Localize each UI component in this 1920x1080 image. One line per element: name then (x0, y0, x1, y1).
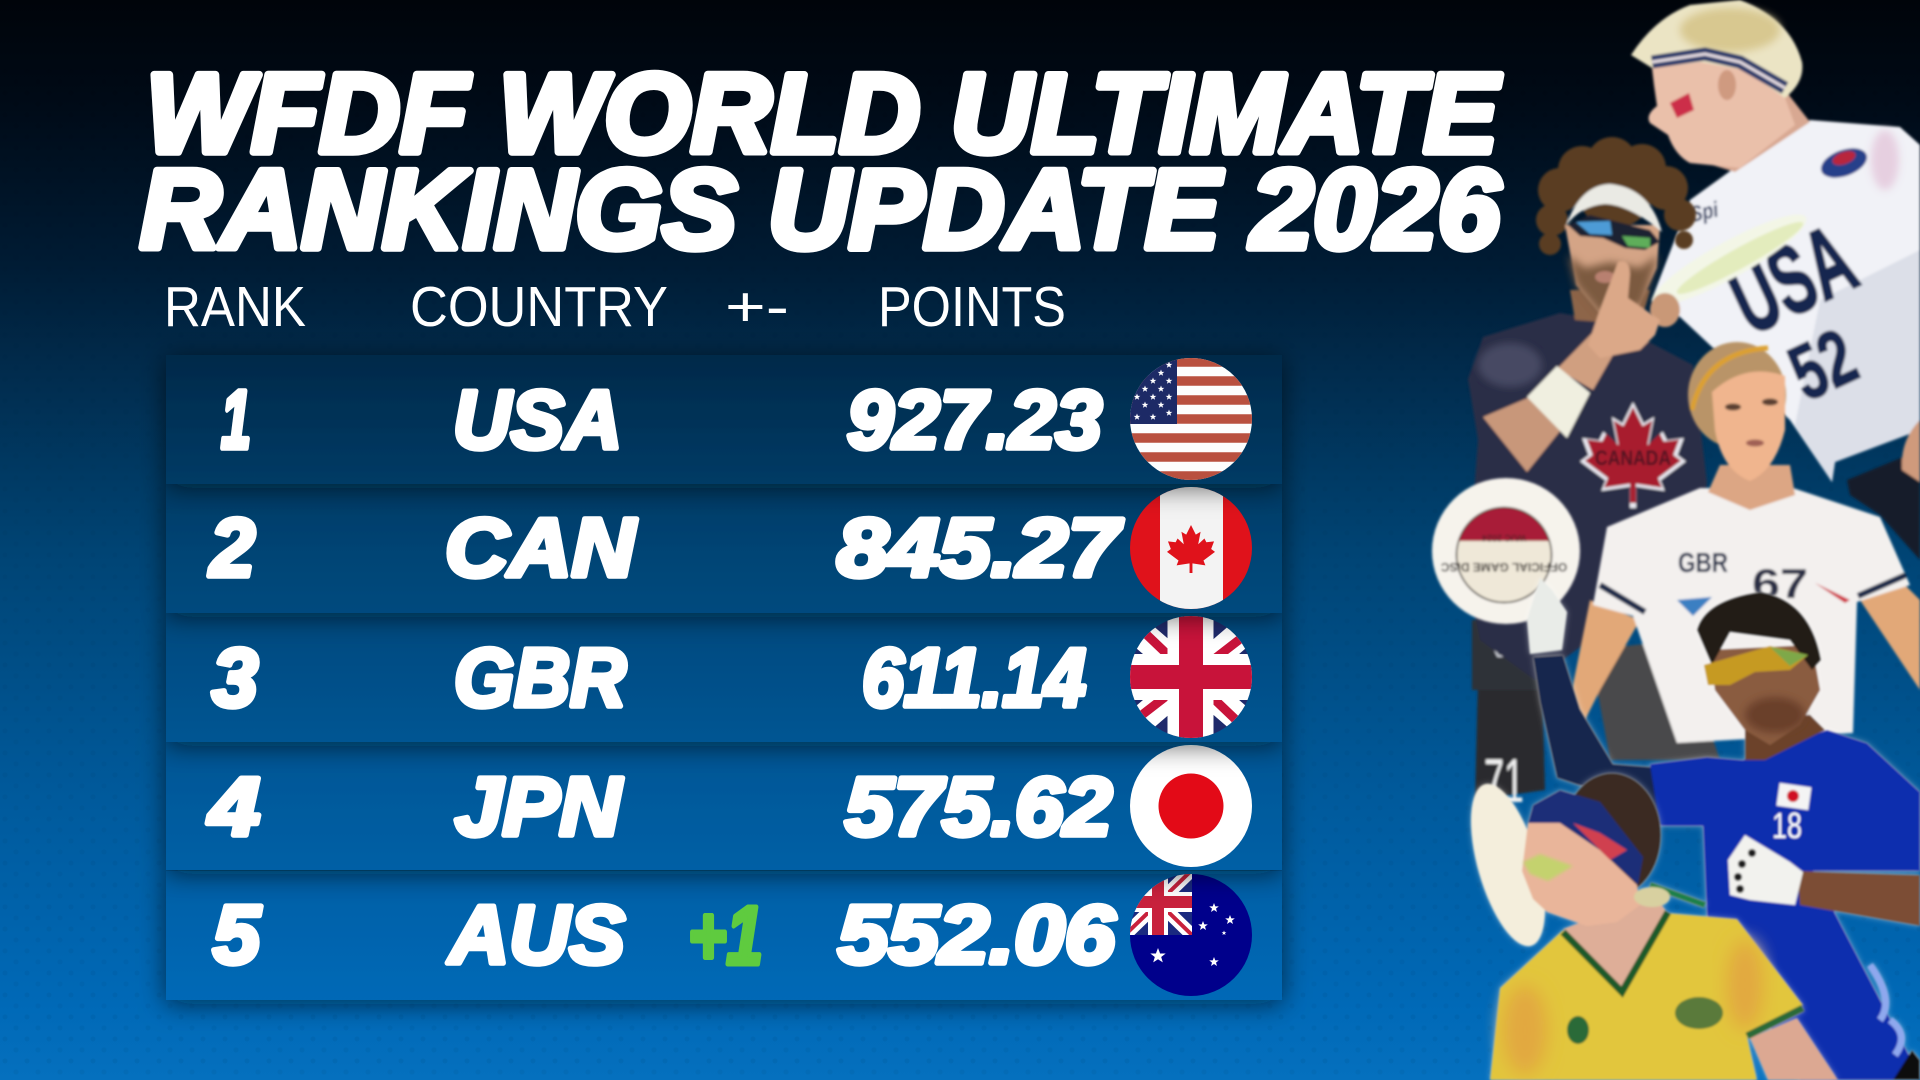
player: Great Britain: 67 (1752, 560, 1808, 607)
pointing hand (1588, 261, 1660, 358)
row: rank 3 Great Britain (166, 610, 1282, 744)
face paint (1670, 93, 1694, 118)
face (1710, 645, 1820, 745)
sunglasses (1568, 215, 1660, 250)
jersey (1593, 488, 1910, 743)
disc: official game disc (1432, 478, 1580, 624)
player: USA: 52 (1776, 311, 1869, 417)
jersey (1490, 913, 1803, 1080)
raised arm (1533, 655, 1660, 826)
disc: official game disc: WUC 2024 (1482, 533, 1526, 543)
row: rank 4 Japan: 575.62 (845, 760, 1112, 853)
jersey lettering: GBR (1678, 547, 1728, 578)
eyes and mouth (1725, 404, 1741, 410)
row: rank 3 Great Britain: GBR (454, 631, 626, 724)
row: rank 5 Australia: 552.06 (838, 888, 1116, 981)
neck (1563, 890, 1667, 991)
table header (164, 275, 1066, 339)
player: Japan (1527, 578, 1920, 1080)
face (1565, 225, 1660, 314)
player: Australia (1456, 773, 1838, 1080)
shorts and leg (1475, 600, 1545, 800)
headband (1528, 790, 1643, 885)
row: rank 5 Australia (166, 870, 1282, 1000)
neck (1708, 465, 1795, 510)
neck (1570, 290, 1650, 325)
title: WFDF WORLD ULTIMATE (146, 51, 1501, 176)
neck (1745, 715, 1825, 760)
row: rank 5 Australia: AUS (447, 888, 625, 981)
forearm (1483, 397, 1577, 472)
row: rank 1 USA (166, 355, 1282, 484)
player photo collage (1432, 0, 1920, 1080)
glove on raised hand (1527, 578, 1567, 654)
hair (1536, 137, 1696, 255)
jersey (1653, 120, 1920, 482)
face (1712, 372, 1785, 481)
table header: +- (725, 275, 789, 339)
row: rank 2 Canada: CAN (445, 501, 637, 594)
hair (1688, 342, 1786, 448)
hair tie (1650, 885, 1705, 905)
player: Canada: CANADA (1595, 447, 1671, 470)
row: rank 4 Japan: 4 (207, 760, 260, 853)
jersey (1650, 730, 1920, 1080)
headband (1652, 54, 1785, 88)
disc: official game disc: OFFICIAL GAME DISC (1440, 560, 1567, 574)
jersey crest (1675, 997, 1723, 1029)
shorts (1590, 640, 1720, 760)
table header: POINTS (878, 275, 1066, 339)
jersey flag (1776, 783, 1811, 810)
row: rank 2 Canada: 845.27 (837, 501, 1123, 594)
glove on chest (1728, 835, 1803, 905)
maple leaf crest (1580, 402, 1686, 508)
shirt (1468, 313, 1707, 680)
hair (1697, 592, 1821, 670)
row: rank 5 Australia: 5 (213, 888, 262, 981)
row: rank 3 Great Britain: 3 (212, 631, 258, 724)
forearm (1797, 871, 1920, 926)
icon: Australia flag (1130, 874, 1252, 996)
table header: COUNTRY (410, 275, 668, 339)
headband (1566, 184, 1662, 232)
jersey logo (1817, 143, 1871, 183)
rankings table (166, 355, 1282, 1000)
player: Great Britain (1572, 342, 1920, 760)
row: rank 3 Great Britain: 611.14 (862, 631, 1086, 724)
headband (1692, 348, 1768, 410)
row: rank 1 USA: 927.23 (847, 373, 1102, 466)
shorts and hand (1847, 450, 1920, 560)
player: USA (1631, 0, 1920, 560)
icon: Canada flag (1130, 487, 1252, 609)
row: rank 4 Japan: JPN (455, 760, 623, 853)
icon: Japan flag (1130, 745, 1252, 867)
shorts corner (1893, 1050, 1920, 1080)
table header: RANK (164, 275, 306, 339)
jersey number: 18 (1772, 805, 1802, 846)
hair (1563, 773, 1661, 897)
row: rank 2 Canada: 2 (208, 501, 255, 594)
throwing hand (1650, 293, 1680, 327)
neck and face (1680, 90, 1810, 172)
face (1522, 823, 1640, 926)
arm (1750, 1018, 1838, 1080)
player: Canada (1468, 137, 1707, 816)
row: rank 1 USA: 1 (221, 373, 251, 466)
row: rank 2 Canada (166, 484, 1282, 613)
row: rank 4 Japan (166, 740, 1282, 872)
wristband (1527, 366, 1590, 438)
title (140, 51, 1501, 272)
face paint (1523, 854, 1573, 881)
row: rank 1 USA: USA (453, 373, 622, 466)
title: RANKINGS UPDATE 2026 (140, 147, 1501, 272)
arms (1572, 600, 1640, 730)
rank change +1: +1 (688, 889, 763, 982)
disc (1643, 202, 1815, 318)
player: USA: Spi (1688, 196, 1721, 227)
icon: USA flag (1130, 358, 1252, 480)
sunglasses (1704, 646, 1808, 685)
jersey number: 71 (1484, 747, 1524, 816)
jersey swirl highlights (1870, 965, 1901, 1055)
disc (1456, 776, 1560, 954)
hair (1631, 0, 1802, 98)
icon: UK flag (1130, 616, 1252, 738)
